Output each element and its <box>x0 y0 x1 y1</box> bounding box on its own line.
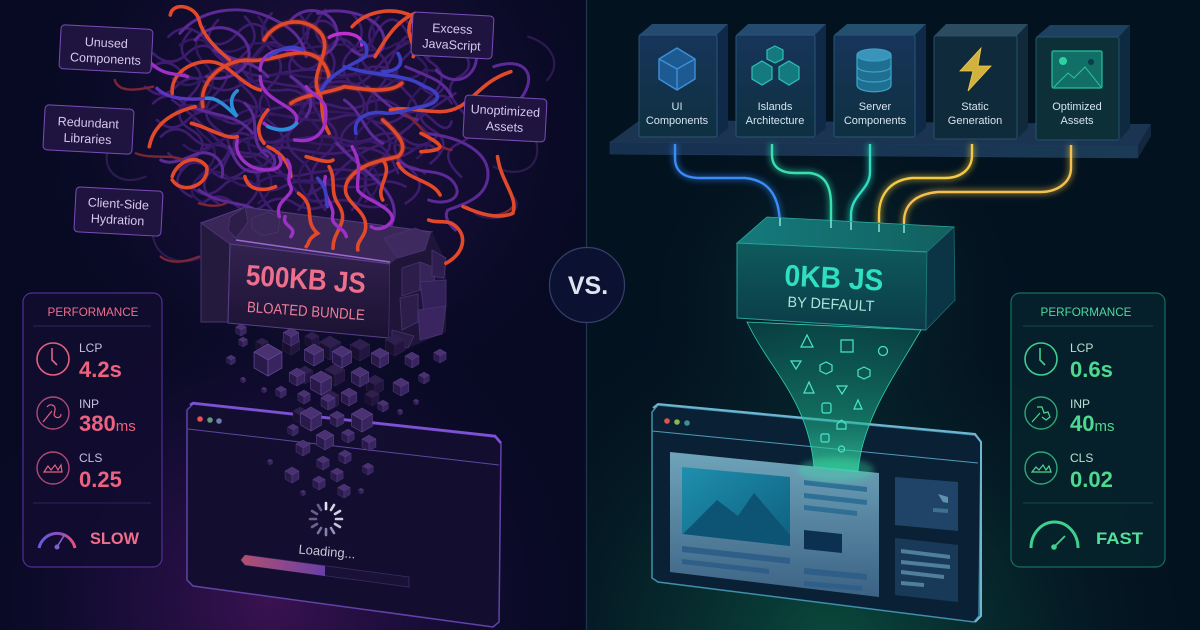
label: Redundant Libraries: Libraries <box>63 131 112 147</box>
label: Unoptimized Assets: Unoptimized <box>470 102 540 120</box>
side card: bottom <box>895 538 958 602</box>
card: UI Components: Components <box>646 115 709 127</box>
label: Unoptimized Assets: Assets <box>485 119 524 135</box>
box subheading: BLOATED BUNDLE <box>246 299 365 324</box>
card: Server Components <box>834 24 926 137</box>
label: Excess JavaScript: JavaScript <box>422 36 482 54</box>
connector wires: glow <box>675 144 1071 233</box>
loading label: Loading... <box>298 542 356 561</box>
metric: INP <box>1025 397 1114 436</box>
hero image <box>682 467 790 546</box>
gauge: fast <box>1031 522 1078 550</box>
card: Optimized Assets: Optimized <box>1052 101 1102 113</box>
metric: LCP <box>37 341 122 382</box>
browser window: loading state <box>187 403 501 627</box>
falling cubes <box>227 324 446 498</box>
metric: INP: 380ms <box>79 411 136 436</box>
metric: CLS: 0.02 <box>1070 467 1113 492</box>
card: Static Generation <box>934 24 1028 139</box>
tangle: bright strands <box>149 7 514 263</box>
icon: hexagons <box>752 46 799 85</box>
label: Unused Components: Components <box>70 50 141 68</box>
component cards <box>639 24 1130 140</box>
card: Server Components: Server <box>859 101 892 113</box>
label: Client-Side Hydration: Client-Side <box>87 195 149 213</box>
icon: lightning bolt <box>960 48 991 91</box>
metric: CLS: CLS <box>1070 451 1093 465</box>
box subheading: BY DEFAULT <box>787 294 875 315</box>
window control dots <box>197 416 222 424</box>
vs badge: VS. <box>568 272 608 300</box>
background: left side <box>0 0 587 630</box>
card: Islands Architecture: Islands <box>758 101 793 113</box>
gauge: slow <box>39 533 75 550</box>
shelf <box>610 120 1151 158</box>
box heading: 0KB JS <box>784 259 884 298</box>
panel: slow performance metrics <box>23 293 162 567</box>
browser window: rendered page <box>652 404 981 622</box>
label: Excess JavaScript <box>411 12 494 59</box>
card: UI Components: UI <box>672 101 682 113</box>
light funnel <box>747 322 921 482</box>
label: Client-Side Hydration: Hydration <box>90 212 145 228</box>
label: Redundant Libraries: Redundant <box>57 114 120 132</box>
box heading: 500KB JS <box>245 260 367 300</box>
labels: bloat causes <box>43 12 547 236</box>
label: Redundant Libraries <box>43 105 134 154</box>
metric: INP: 40ms <box>1070 411 1114 436</box>
fast bundle box <box>737 217 955 330</box>
metric: LCP: LCP <box>1070 341 1093 355</box>
side card: top <box>895 477 958 531</box>
panel heading: PERFORMANCE <box>48 306 139 319</box>
funnel shapes <box>791 335 888 452</box>
metric: CLS <box>1025 451 1113 492</box>
metric: INP: INP <box>79 397 99 411</box>
status: fast: FAST <box>1096 529 1144 548</box>
card: Optimized Assets <box>1036 25 1130 140</box>
metric: LCP: 4.2s <box>79 357 122 382</box>
label: Client-Side Hydration <box>74 187 163 236</box>
progress bar <box>241 555 409 587</box>
tangle: dim background mesh <box>107 10 554 262</box>
card: Server Components: Components <box>844 115 907 127</box>
card: Static Generation: Generation <box>948 115 1002 127</box>
icon: image <box>1052 51 1102 88</box>
icon: cube <box>659 48 695 90</box>
jagged block fragments <box>228 207 446 348</box>
card: Optimized Assets: Assets <box>1060 115 1094 127</box>
label: Unused Components <box>59 25 153 73</box>
metric: LCP <box>1025 341 1113 382</box>
icon: database <box>857 49 891 92</box>
metric: INP: INP <box>1070 397 1090 411</box>
card: Islands Architecture <box>736 24 826 137</box>
metric: CLS: 0.25 <box>79 467 122 492</box>
metric: CLS <box>37 451 122 492</box>
card: Static Generation: Static <box>961 101 989 113</box>
rendered page content <box>670 452 879 597</box>
panel heading: PERFORMANCE <box>1041 306 1132 319</box>
loading spinner <box>310 503 342 535</box>
window control dots <box>664 418 690 426</box>
label: Unused Components: Unused <box>84 35 128 51</box>
panel: fast performance metrics <box>1011 293 1165 567</box>
card: Islands Architecture: Architecture <box>746 115 804 127</box>
status: slow: SLOW <box>90 529 140 548</box>
connector wires <box>675 144 1071 233</box>
metric: INP <box>37 397 136 436</box>
metric: LCP: LCP <box>79 341 102 355</box>
bloated bundle box <box>201 207 446 350</box>
metric: CLS: CLS <box>79 451 102 465</box>
card: UI Components <box>639 24 728 137</box>
label: Excess JavaScript: Excess <box>432 21 473 37</box>
vs badge <box>550 248 624 322</box>
background: right side <box>587 0 1200 630</box>
label: Unoptimized Assets <box>463 95 547 142</box>
metric: LCP: 0.6s <box>1070 357 1113 382</box>
